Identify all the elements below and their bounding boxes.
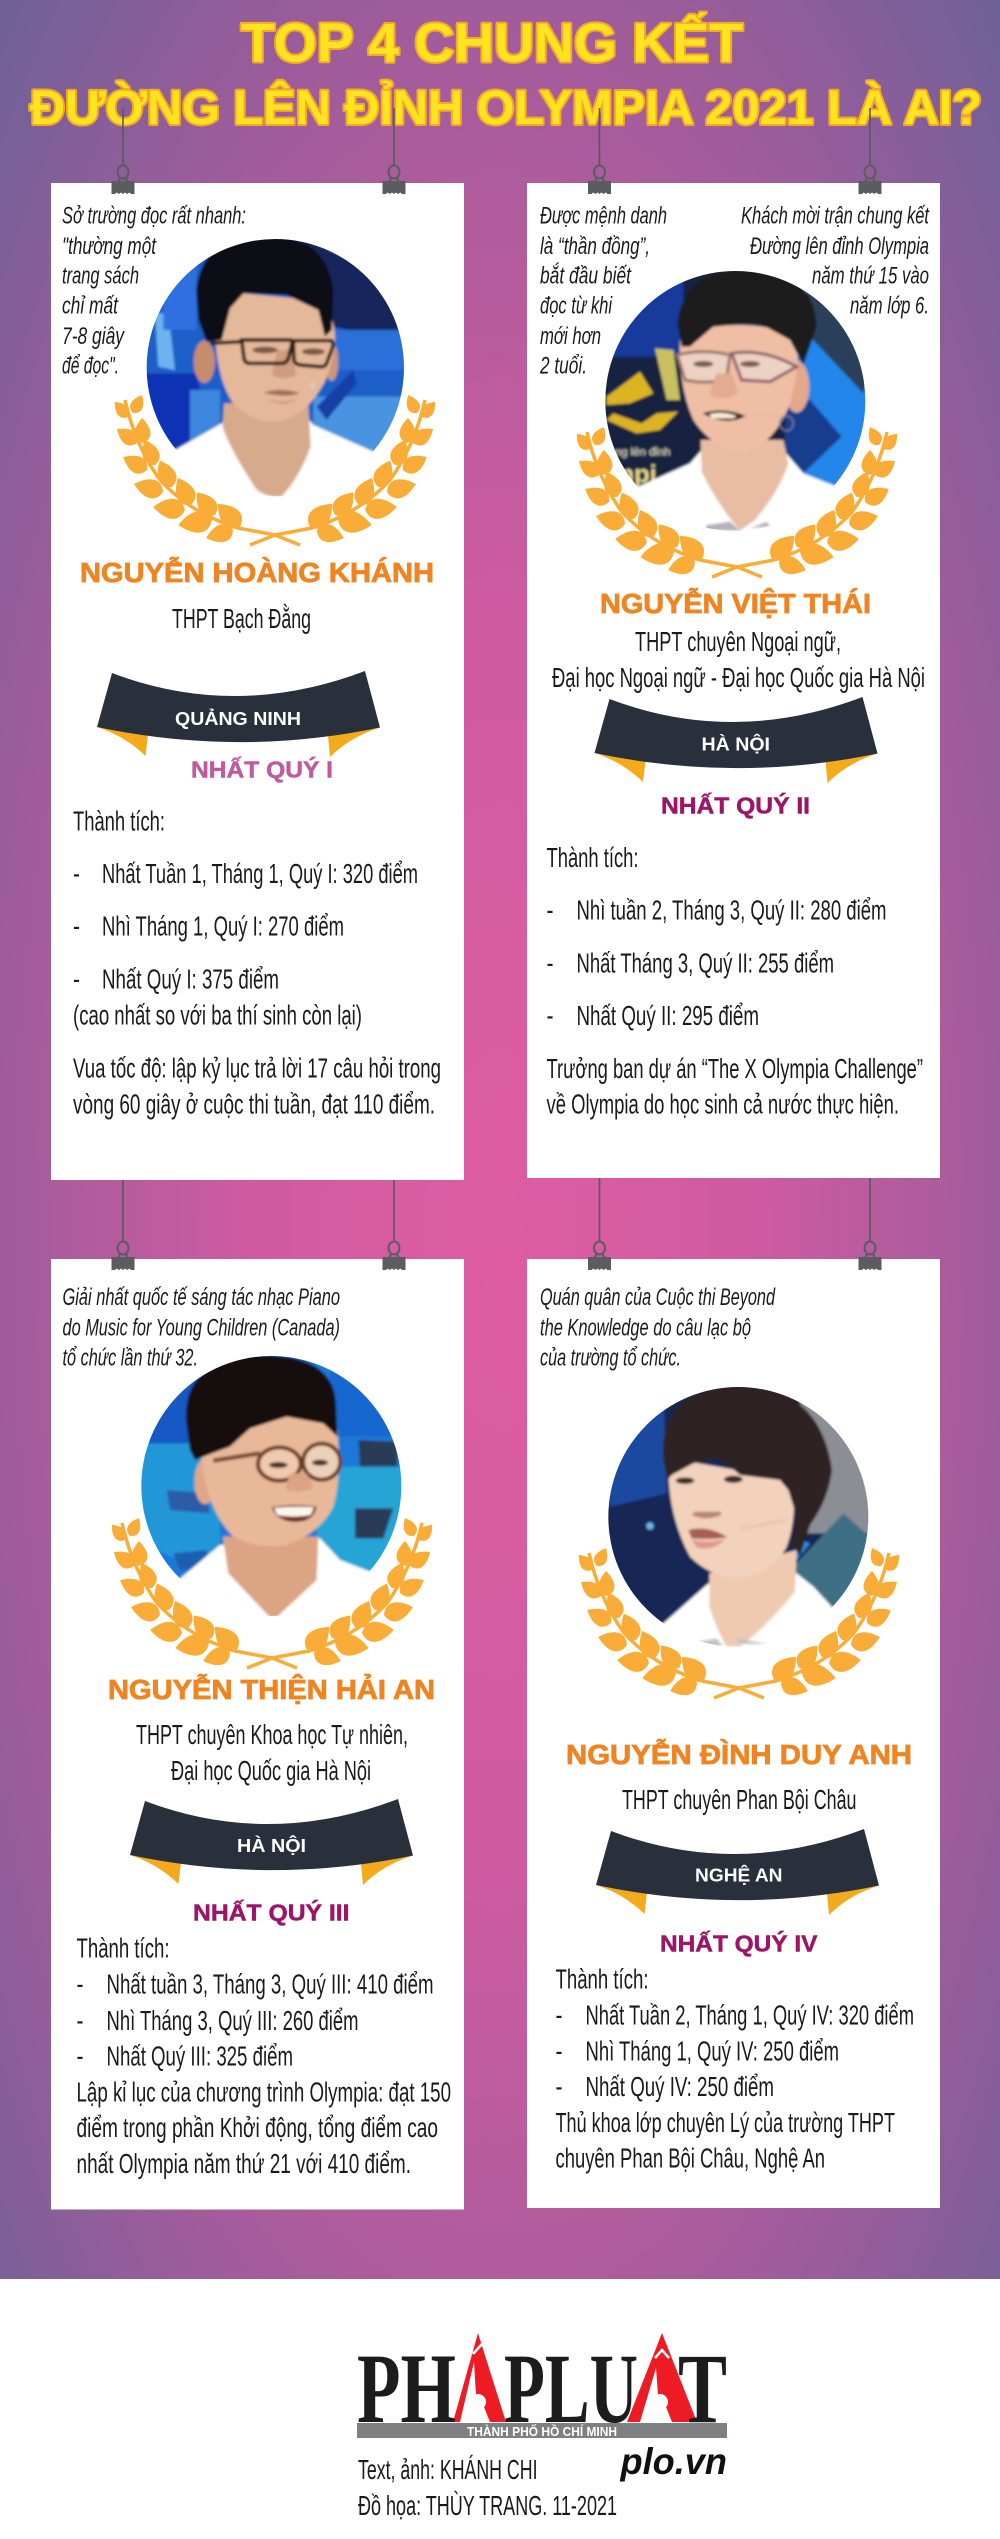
name: NGUYỄN ĐÌNH DUY ANH bbox=[566, 1739, 912, 1770]
laurel wreath bbox=[107, 1515, 437, 1669]
laurel wreath bbox=[572, 424, 902, 578]
ribbon: province: NGHỆ AN bbox=[695, 1864, 782, 1886]
laurel wreath bbox=[574, 1545, 904, 1699]
school bbox=[552, 626, 925, 693]
quote bbox=[62, 1284, 340, 1372]
achievements: - bbox=[556, 2071, 562, 2102]
achievements: - bbox=[73, 858, 80, 889]
quote: trang sách bbox=[62, 262, 139, 290]
laurel wreath bbox=[110, 392, 440, 546]
quote: Sở trường đọc rất nhanh: bbox=[62, 202, 246, 230]
quote: để đọc". bbox=[62, 352, 119, 380]
logo letters: T bbox=[678, 2333, 727, 2444]
portrait photo: mpi bbox=[612, 460, 657, 488]
quote: "thường một bbox=[62, 233, 157, 260]
achievements: Nhì Tháng 1, Quý I: 270 điểm bbox=[102, 910, 344, 942]
logo subtitle: THÀNH PHỐ HỒ CHÍ MINH bbox=[467, 2424, 617, 2439]
achievements: Nhất Quý IV: 250 điểm bbox=[586, 2071, 774, 2102]
achievements: chuyên Phan Bội Châu, Nghệ An bbox=[556, 2142, 825, 2174]
school: THPT chuyên Phan Bội Châu bbox=[622, 1784, 856, 1815]
portrait photo bbox=[141, 1356, 402, 1616]
achievements bbox=[73, 806, 441, 1120]
quote: Quán quân của Cuộc thi Beyond bbox=[540, 1284, 776, 1311]
binder clips bbox=[112, 166, 882, 1270]
achievements: Nhất Quý I: 375 điểm bbox=[102, 964, 279, 994]
quote: chỉ mất bbox=[62, 292, 119, 320]
portrait photo bbox=[608, 1387, 868, 1647]
achievements: Thành tích: bbox=[73, 806, 165, 836]
credits bbox=[358, 2454, 617, 2521]
achievements: Nhì Tháng 3, Quý III: 260 điểm bbox=[106, 2005, 358, 2036]
award: NHẤT QUÝ II bbox=[661, 792, 810, 818]
achievements bbox=[76, 1932, 451, 2179]
panel: Nguyễn Hoàng Khánh bbox=[51, 183, 464, 1180]
quote: 7-8 giây bbox=[62, 323, 125, 350]
achievements: Nhất tuần 3, Tháng 3, Quý III: 410 điểm bbox=[106, 1968, 434, 2000]
hanging strings bbox=[123, 108, 870, 1242]
achievements bbox=[546, 842, 923, 1120]
achievements: nhất Olympia năm thứ 21 với 410 điểm. bbox=[76, 2148, 411, 2179]
card background bbox=[527, 183, 940, 1178]
portrait photo: ng lên đỉnh bbox=[615, 447, 670, 459]
achievements: (cao nhất so với ba thí sinh còn lại) bbox=[73, 1000, 362, 1030]
ribbon: province: HÀ NỘI bbox=[702, 734, 770, 754]
quote left bbox=[539, 202, 667, 380]
card background bbox=[51, 1259, 464, 2210]
achievements: Nhì Tháng 1, Quý IV: 250 điểm bbox=[586, 2036, 839, 2066]
achievements: Nhất Quý III: 325 điểm bbox=[106, 2040, 293, 2072]
website: plo.vn bbox=[620, 2441, 727, 2482]
quote bbox=[62, 202, 246, 380]
card background bbox=[527, 1259, 940, 2208]
name: NGUYỄN THIỆN HẢI AN bbox=[108, 1673, 435, 1705]
credits: Đồ họa: THÙY TRANG. 11-2021 bbox=[358, 2490, 617, 2521]
achievements: - bbox=[76, 2005, 84, 2036]
award: NHẤT QUÝ IV bbox=[660, 1930, 818, 1956]
quote left: đọc từ khi bbox=[540, 292, 612, 320]
achievements: Lập kỉ lục của chương trình Olympia: đạt 150 bbox=[76, 2076, 451, 2108]
logo letters: PH bbox=[357, 2333, 456, 2444]
ribbon: province: HÀ NỘI bbox=[237, 1835, 306, 1856]
achievements: - bbox=[76, 2040, 84, 2072]
achievements: - bbox=[73, 910, 80, 942]
achievements: - bbox=[546, 894, 554, 926]
achievements: Nhất Tuần 1, Tháng 1, Quý I: 320 điểm bbox=[102, 858, 418, 889]
school: THPT chuyên Ngoại ngữ, bbox=[635, 626, 841, 657]
panel: Nguyễn Thiện Hải An bbox=[51, 1259, 464, 2210]
quote: tổ chức lần thứ 32. bbox=[62, 1344, 198, 1372]
achievements: - bbox=[546, 948, 554, 978]
achievements: Thành tích: bbox=[76, 1932, 170, 1964]
quote: Giải nhất quốc tế sáng tác nhạc Piano bbox=[62, 1284, 340, 1311]
achievements: Nhất Tháng 3, Quý II: 255 điểm bbox=[576, 948, 834, 978]
ribbon: province bbox=[596, 1829, 879, 1915]
award: NHẤT QUÝ I bbox=[191, 756, 333, 782]
panel: Nguyễn Đình Duy Anh bbox=[527, 1259, 940, 2208]
logo red A right bbox=[627, 2333, 697, 2422]
quote left: 2 tuổi. bbox=[539, 352, 587, 380]
quote left: Được mệnh danh bbox=[540, 202, 667, 230]
achievements bbox=[556, 1964, 914, 2174]
school: Đại học Quốc gia Hà Nội bbox=[171, 1755, 371, 1786]
quote left: là “thần đồng”, bbox=[540, 233, 650, 260]
portrait photo bbox=[605, 271, 866, 531]
achievements: Nhất Quý II: 295 điểm bbox=[576, 1000, 759, 1031]
quote left: bắt đầu biết bbox=[540, 262, 632, 290]
school bbox=[136, 1719, 408, 1786]
achievements: - bbox=[556, 2000, 562, 2030]
award: NHẤT QUÝ III bbox=[193, 1898, 350, 1926]
title: TOP 4 CHUNG KẾT bbox=[241, 12, 743, 74]
quote: the Knowledge do câu lạc bộ bbox=[540, 1314, 751, 1342]
achievements: vòng 60 giây ở cuộc thi tuần, đạt 110 điểm. bbox=[73, 1088, 435, 1120]
achievements: - bbox=[546, 1000, 554, 1031]
name: NGUYỄN VIỆT THÁI bbox=[600, 588, 871, 619]
title bbox=[30, 12, 982, 135]
achievements: Vua tốc độ: lập kỷ lục trả lời 17 câu hỏi trong bbox=[73, 1052, 441, 1084]
achievements: - bbox=[556, 2036, 562, 2066]
logo grey bar bbox=[357, 2423, 727, 2438]
logo red A left bbox=[453, 2333, 506, 2422]
quote: do Music for Young Children (Canada) bbox=[62, 1314, 340, 1342]
school: THPT Bạch Đằng bbox=[172, 603, 311, 634]
school: THPT chuyên Khoa học Tự nhiên, bbox=[136, 1719, 408, 1750]
achievements: Thành tích: bbox=[556, 1964, 648, 1994]
card background bbox=[51, 183, 464, 1180]
logo letters bbox=[357, 2333, 727, 2444]
achievements: điểm trong phần Khởi động, tổng điểm cao bbox=[76, 2112, 438, 2143]
title: ĐƯỜNG LÊN ĐỈNH OLYMPIA 2021 LÀ AI? bbox=[30, 80, 982, 135]
achievements: - bbox=[76, 1968, 84, 2000]
quote right: năm thứ 15 vào bbox=[812, 262, 929, 290]
quote left: mới hơn bbox=[540, 323, 601, 350]
quote right bbox=[741, 202, 930, 320]
panel: Nguyễn Việt Thái bbox=[527, 183, 940, 1178]
ribbon: province: QUẢNG NINH bbox=[175, 708, 301, 729]
quote right: năm lớp 6. bbox=[850, 292, 929, 320]
achievements: - bbox=[73, 964, 80, 994]
ribbon: province bbox=[130, 1799, 413, 1885]
quote bbox=[540, 1284, 776, 1372]
credits: Text, ảnh: KHÁNH CHI bbox=[358, 2454, 538, 2485]
ribbon: province bbox=[594, 697, 878, 783]
footer logo: Pháp Luật bbox=[357, 2333, 727, 2444]
portrait photo bbox=[146, 239, 404, 496]
logo letters: PLU bbox=[504, 2333, 638, 2444]
ribbon: province bbox=[97, 671, 380, 757]
achievements: Thành tích: bbox=[546, 842, 638, 873]
name: NGUYỄN HOÀNG KHÁNH bbox=[80, 557, 434, 588]
quote: của trường tổ chức. bbox=[540, 1344, 681, 1372]
